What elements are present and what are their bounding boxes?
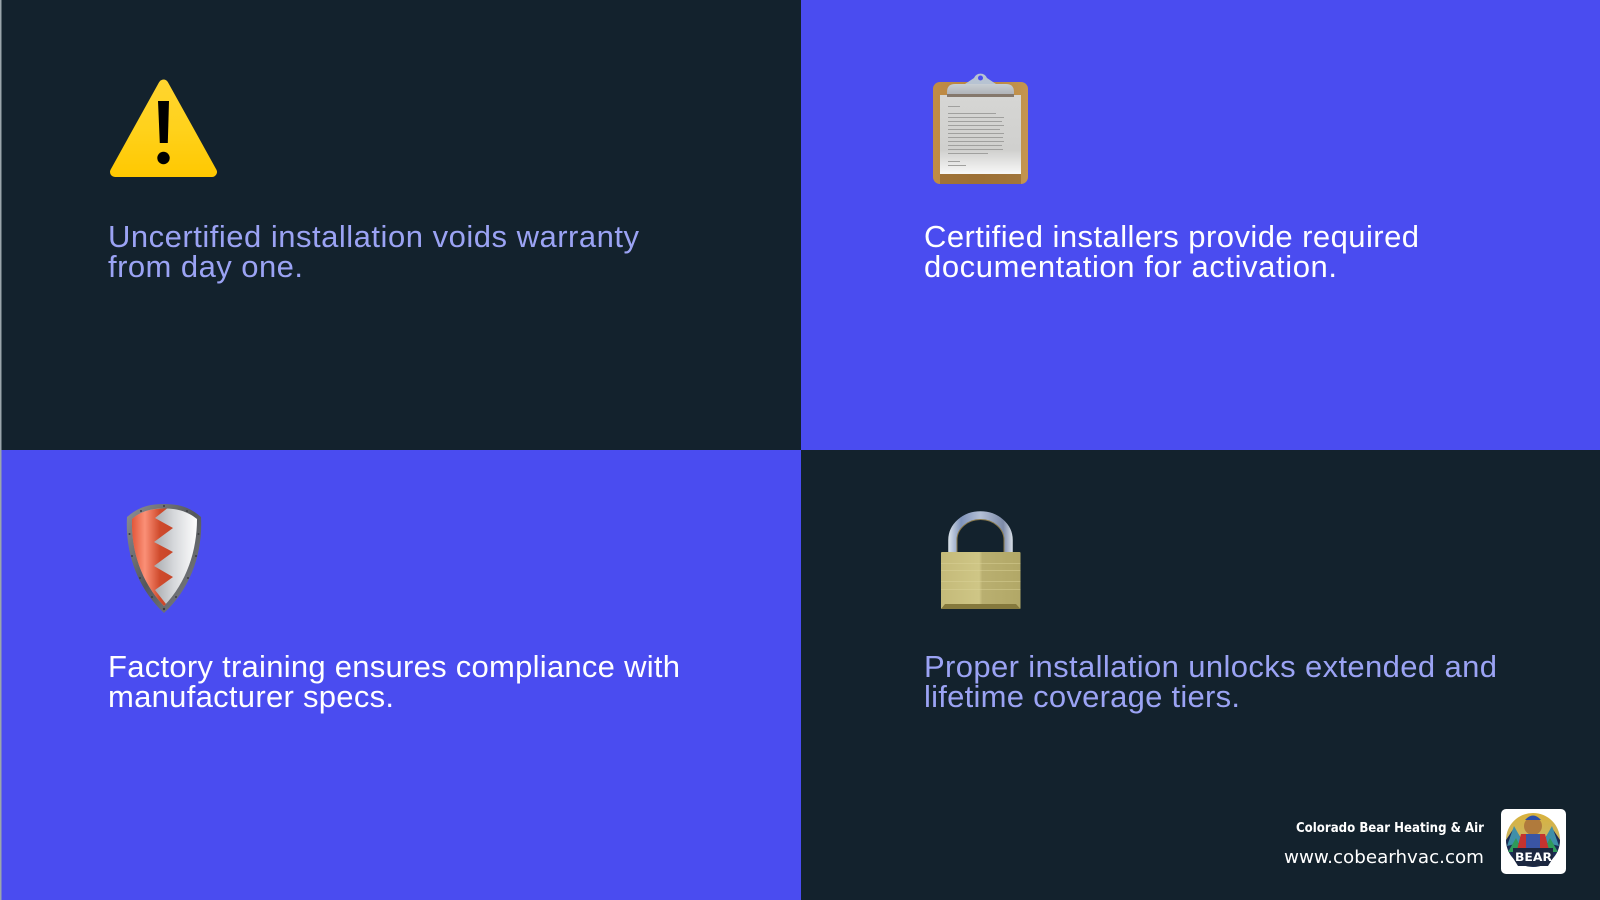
text: certified installers: Certified installers provide required — [924, 219, 1419, 254]
footer: brand name and website: Colorado Bear Heating & Air — [1296, 821, 1485, 836]
icon: warning triangle — [115, 84, 212, 172]
text: factory training: Factory training ensures compliance with — [108, 649, 680, 684]
panel: bottom right dark — [801, 450, 1600, 900]
icon: shield — [127, 504, 201, 613]
icon: padlock — [941, 516, 1020, 609]
text: factory training: manufacturer specs. — [108, 679, 394, 714]
footer: brand name and website — [1284, 821, 1485, 868]
icon: clipboard — [933, 74, 1028, 184]
text: certified installers: documentation for activation. — [924, 249, 1337, 284]
panel: bottom left blue — [0, 450, 801, 900]
panel: top right blue — [801, 0, 1600, 450]
logo: Colorado Bear badge: BEAR — [1515, 850, 1552, 864]
text: uncertified installation: Uncertified installation voids warranty — [108, 219, 640, 254]
footer: brand name and website: www.cobearhvac.com — [1284, 847, 1484, 868]
logo: Colorado Bear badge — [1501, 809, 1566, 874]
text: proper installation: lifetime coverage tiers. — [924, 679, 1240, 714]
text: proper installation: Proper installation unlocks extended and — [924, 649, 1497, 684]
text: uncertified installation: from day one. — [108, 249, 303, 284]
panel: top left dark — [0, 0, 801, 450]
